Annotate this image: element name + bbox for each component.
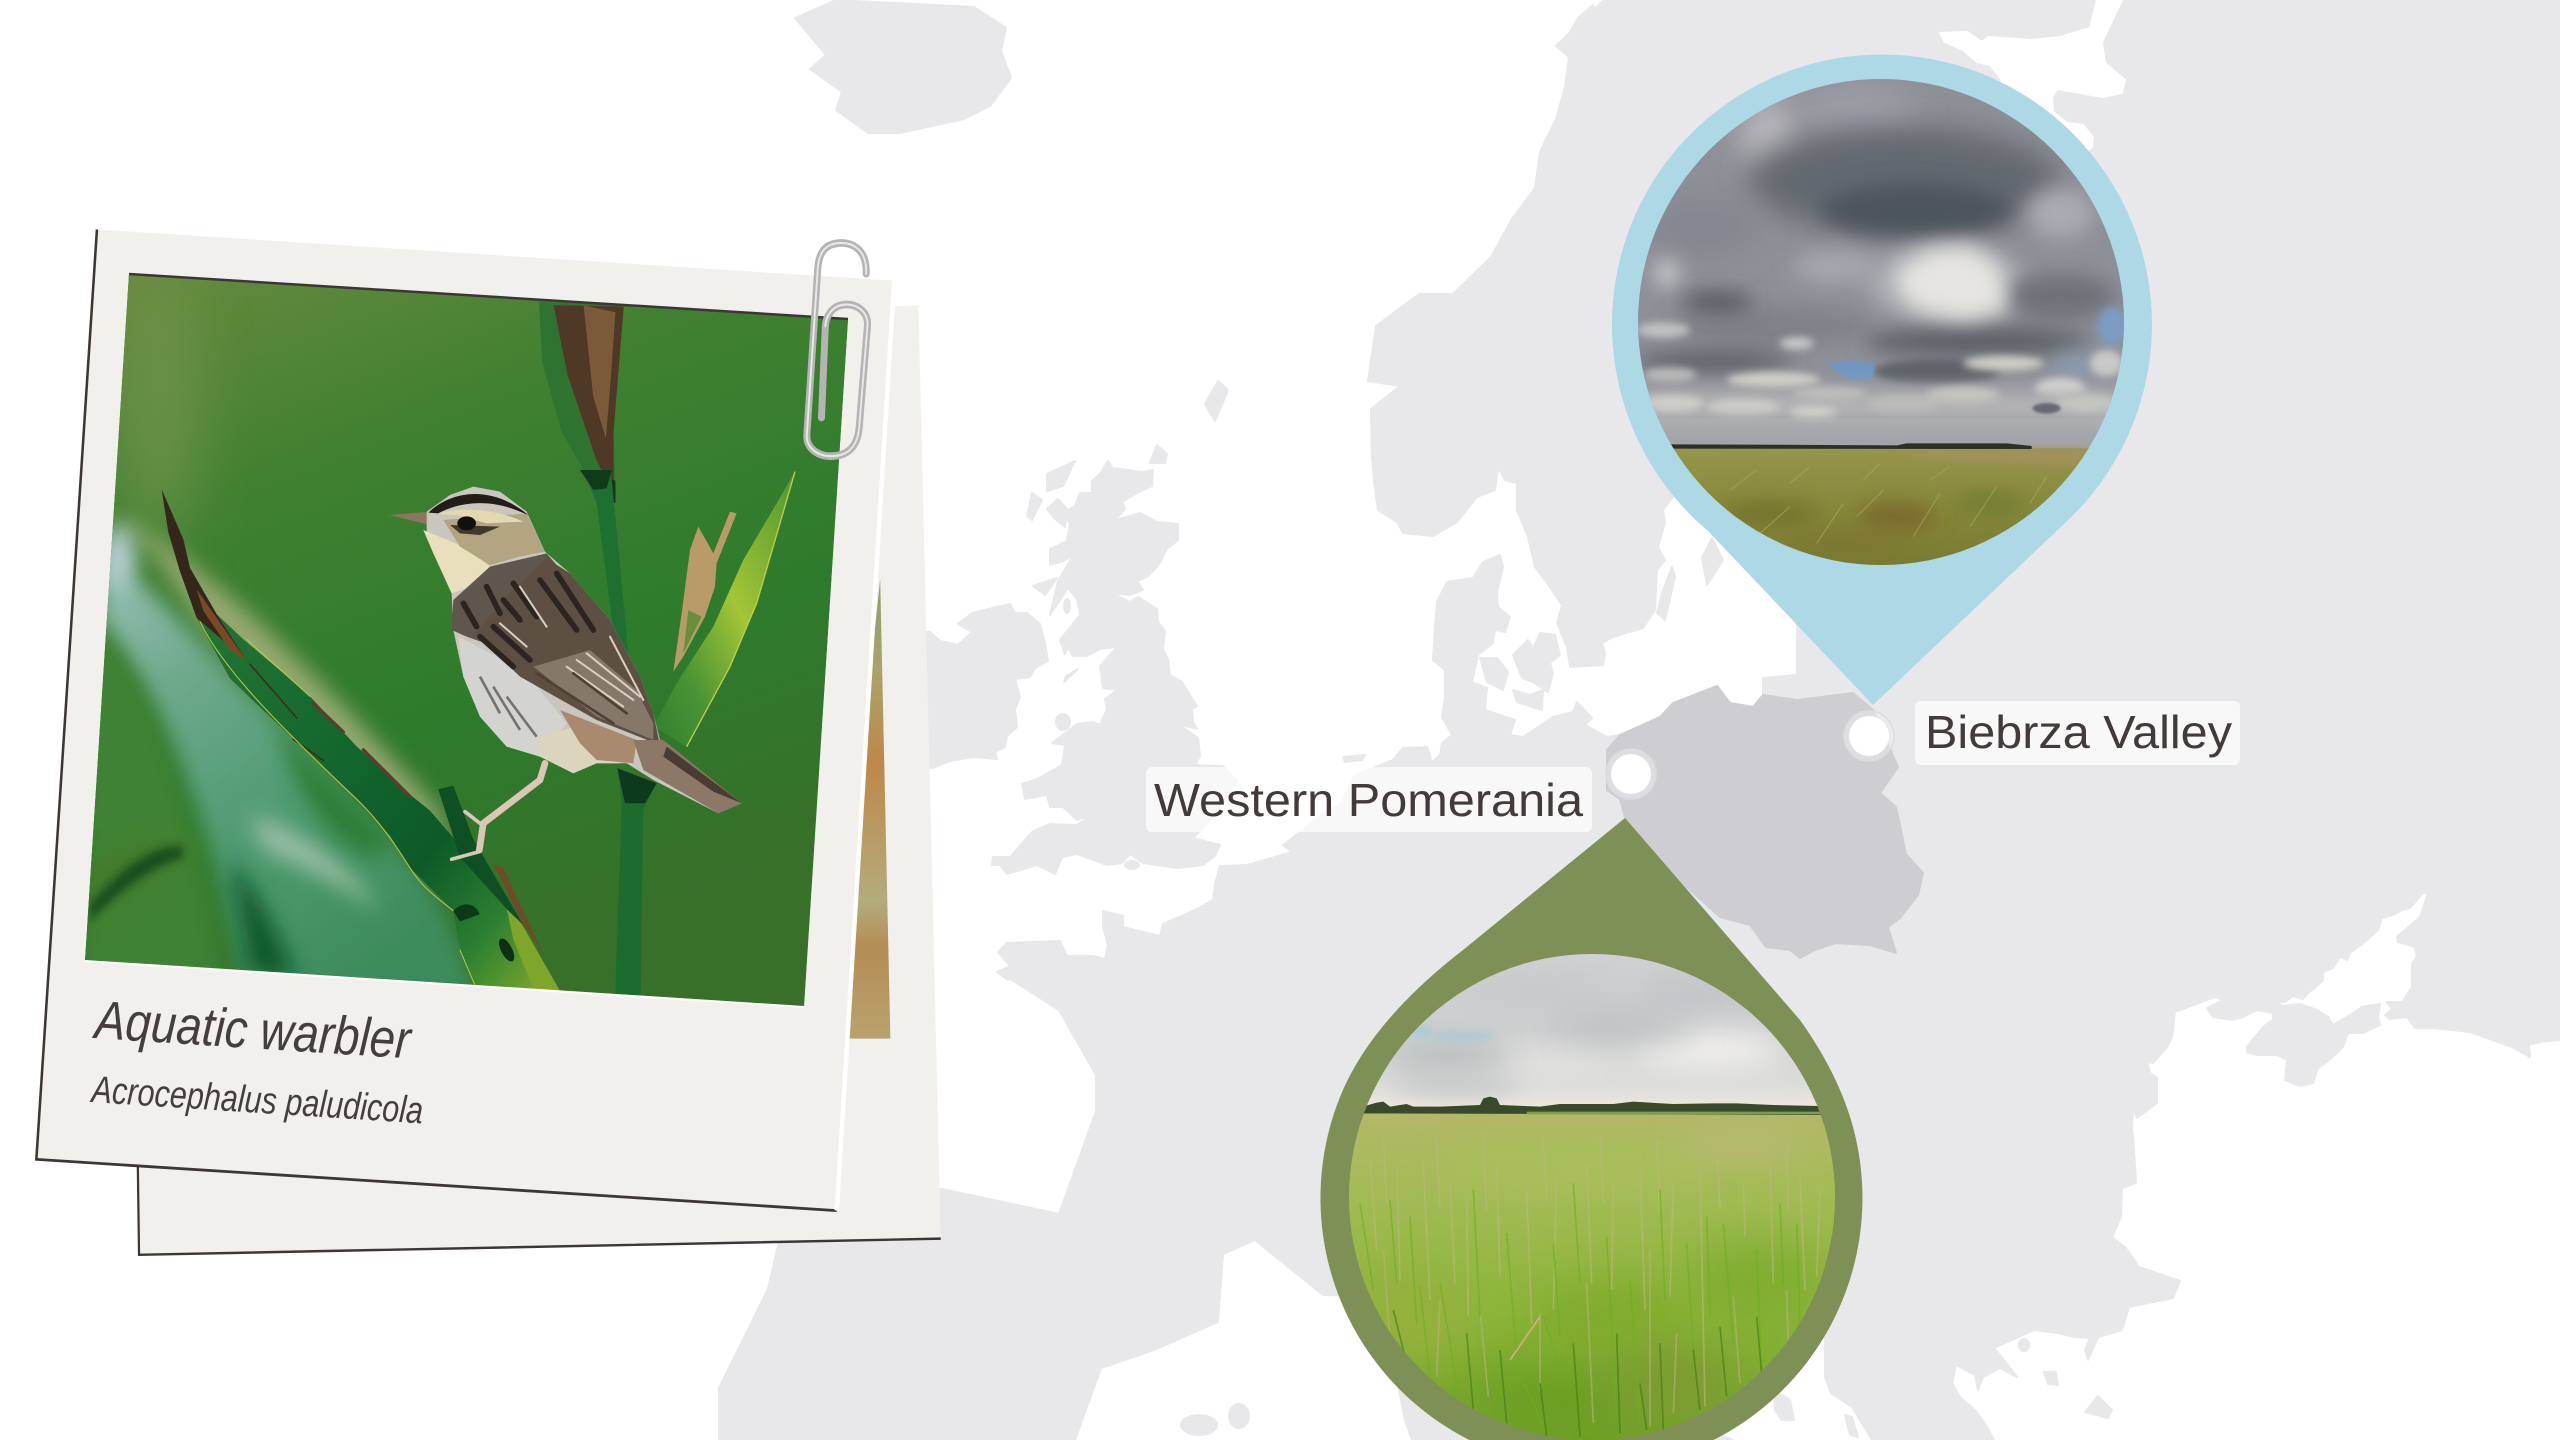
Gulf of Finland (1940, 0, 2125, 170)
meadow blades (1360, 1137, 1820, 1440)
tail (633, 740, 742, 813)
label: Biebrza Valley: Biebrza Valley (1925, 706, 2232, 758)
Ireland (915, 604, 1048, 768)
upper stem (588, 472, 628, 652)
Great Britain (992, 461, 1237, 874)
wing (475, 558, 660, 745)
low cloud band (1630, 387, 2130, 448)
beak (390, 512, 427, 524)
pin: Biebrza Valley (1612, 55, 2152, 705)
map of Europe (719, 0, 2560, 1440)
blurred background foliage and foreground leaf (83, 489, 560, 1000)
meadow treeline (1363, 1097, 1822, 1115)
right leaf (653, 472, 795, 747)
Scandinavia (1368, 0, 1900, 667)
marker: Biebrza Valley (1844, 711, 1894, 761)
leaf dry tip (162, 489, 247, 661)
blue pin shape (1612, 55, 2152, 705)
seed head (539, 302, 622, 480)
marker: Western Pomerania (1606, 749, 1656, 799)
foreground leaf (162, 489, 560, 991)
dry leaf (673, 512, 737, 672)
perch stub (438, 786, 523, 925)
photo: cloudy sky over Biebrza (1630, 70, 2130, 572)
Biebrza grass (1674, 448, 2088, 565)
paperclip (807, 243, 868, 456)
leaf edge damage (200, 621, 477, 989)
Biebrza treeline (1670, 443, 2032, 449)
label: Western Pomerania: Western Pomerania (1154, 774, 1583, 826)
warbler, stems and reed leaves (389, 470, 795, 1003)
caption: scientific name: Acrocephalus paludicola (89, 1069, 424, 1132)
bird body (427, 487, 742, 813)
small islands (1027, 5, 2112, 1440)
green pin shape (1320, 818, 1862, 1440)
rump (560, 710, 637, 763)
back polaroid (138, 305, 941, 1255)
face (443, 513, 545, 565)
wing stripes (463, 573, 643, 723)
throat (423, 530, 490, 593)
meadow grass (1340, 1113, 1840, 1440)
pin: Western Pomerania (1320, 818, 1862, 1440)
Poland highlighted (1607, 686, 1923, 958)
breast (452, 553, 556, 642)
photo: green meadow (1340, 950, 1840, 1440)
crown (428, 494, 528, 515)
photo top shadow line (129, 274, 848, 319)
polaroid card (36, 229, 894, 1211)
continental Europe (719, 0, 2560, 1440)
lower stem (615, 768, 657, 1003)
photo: aquatic warbler (80, 270, 860, 1010)
Iceland (795, 0, 1011, 133)
front polaroid (36, 229, 894, 1211)
bird legs (452, 763, 545, 859)
caption: common name: Aquatic warbler (91, 990, 414, 1070)
back polaroid edge lines (138, 1161, 941, 1255)
belly (458, 637, 567, 757)
back photo sliver (848, 579, 890, 1039)
